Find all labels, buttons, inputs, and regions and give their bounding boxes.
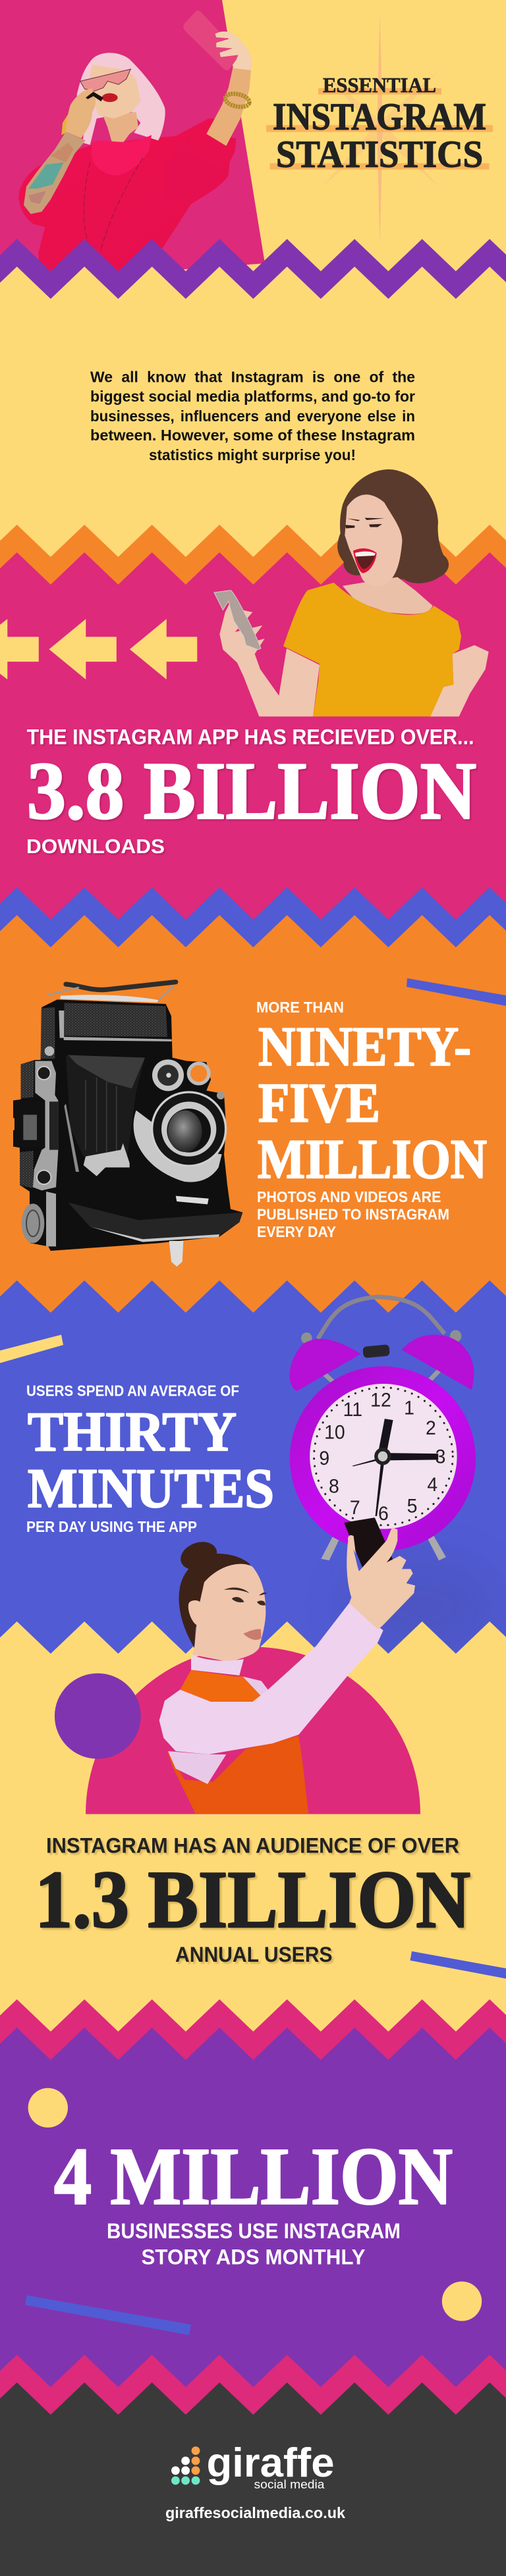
winding knob [46,1192,56,1246]
orange vest [180,1670,262,1702]
gold bracelet [224,92,250,109]
photo: purple alarm clock [290,1297,476,1560]
panel: 4 million businesses [0,1999,506,2390]
description [257,1188,449,1240]
blue accent bar [407,978,506,1006]
photo: woman with pink hair taking a selfie [18,11,252,276]
yellow accent bar [0,1335,63,1363]
numerals [319,1390,445,1525]
panel: introduction [0,239,506,560]
panel: footer [0,2355,506,2576]
bell posts [323,1369,441,1384]
title [266,73,493,176]
hair [337,469,449,583]
strap [66,982,176,990]
logo wordmark: giraffe [207,2440,335,2486]
numerals: 2 [426,1418,436,1439]
big number: FIVE [258,1072,380,1134]
big number: THIRTY [28,1401,237,1463]
hand with lipstick [66,89,96,138]
panel: header [0,0,506,303]
intro text: statistics might surprise you! [149,446,356,463]
yellow background [0,267,506,560]
pink semicircle [86,1647,420,1814]
numerals: 7 [350,1497,360,1519]
blue background [0,1280,506,1659]
sub-heading: DOWNLOADS [26,835,165,858]
hammer [362,1344,390,1358]
lead-in text: USERS SPEND AN AVERAGE OF [26,1382,239,1399]
raised fist [430,645,489,716]
cowl neck [91,135,152,176]
feet [321,1534,446,1560]
big number: 4 MILLION [54,2132,453,2222]
arm and hand [219,601,320,716]
lens assembly [134,1111,222,1182]
description: STORY ADS MONTHLY [141,2245,365,2269]
bellows [66,1055,145,1157]
pink background [0,552,506,922]
outer ring [290,1367,476,1551]
knobs [301,1332,312,1344]
phone [183,11,239,70]
icon: logo dots [171,2446,200,2484]
minute dots [314,1388,453,1525]
hair [77,53,165,145]
blue accent bar [410,1951,506,1979]
lead-in text: MORE THAN [256,999,344,1016]
purple zigzag band [0,239,506,309]
top dial [152,1059,184,1091]
head and neck [188,1564,266,1662]
neck and chest [343,577,433,614]
phone [345,1519,393,1571]
foot [169,1241,183,1267]
raised arm and hand [206,32,252,146]
title: ESSENTIAL [323,73,436,97]
clock hands [352,1419,438,1516]
logo tagline: social media [254,2478,325,2491]
hand [347,1540,415,1629]
lips [102,93,118,102]
panel: ninety-five million [0,887,506,1317]
big number: NINETY- [258,1016,471,1078]
sunglasses [80,69,130,91]
intro text [90,369,415,463]
yellow background [0,1621,506,2034]
description: BUSINESSES USE INSTAGRAM [107,2219,401,2243]
drop base [68,1203,242,1240]
big number: MILLION [258,1128,487,1190]
numerals: 5 [407,1496,417,1517]
bells [290,1339,361,1391]
numerals: 10 [324,1422,345,1444]
pink zigzag band [0,1999,506,2064]
description: PUBLISHED TO INSTAGRAM [257,1206,449,1223]
numerals: 1 [404,1398,414,1419]
leather top [64,1003,167,1037]
left chrome frame [33,1061,58,1190]
blue zigzag band [0,887,506,955]
intro text: businesses, influencers and everyone else in [90,407,415,425]
heading: INSTAGRAM HAS AN AUDIENCE OF OVER [46,1833,459,1857]
hair [179,1554,250,1648]
purple background [0,2028,506,2390]
yellow dress [283,583,461,716]
tattooed forearm [24,132,86,214]
orange background [0,915,506,1317]
lilac collar [191,1654,244,1675]
photo: vintage folding camera [13,982,242,1267]
pink angled shape [0,0,265,283]
mouth [353,548,377,573]
heading: THE INSTAGRAM APP HAS RECIEVED OVER... [27,725,474,749]
facial features [224,1587,267,1606]
panel: thirty minutes [0,1280,506,1659]
dark background [0,2382,506,2576]
numerals: 11 [343,1400,362,1421]
star decoration [323,13,438,245]
phone [214,591,261,650]
website url: giraffesocialmedia.co.uk [165,2504,345,2521]
numerals: 4 [427,1474,437,1496]
numerals: 9 [319,1448,329,1469]
numerals: 6 [378,1504,389,1525]
big number: 3.8 BILLION [27,746,476,836]
description: EVERY DAY [257,1223,336,1240]
description: PER DAY USING THE APP [26,1518,197,1535]
hair bun [177,1537,221,1575]
photo: excited woman with phone [214,469,489,716]
lilac sleeve [159,1603,383,1754]
intro text: biggest social media platforms, and go-to for [90,388,415,405]
purple circle [55,1673,141,1759]
big number: MINUTES [28,1458,274,1519]
pink zigzag band [0,2355,506,2423]
description [107,2219,401,2269]
description: PHOTOS AND VIDEOS ARE [257,1188,441,1205]
numerals: 12 [370,1390,391,1411]
chrome lever [84,1143,130,1176]
numerals: 3 [436,1446,445,1468]
lilac under-sleeve [168,1677,268,1784]
big number [258,1016,487,1190]
handle [318,1297,445,1339]
film holder [13,1101,45,1147]
orange zigzag band [0,525,506,592]
yellow dot top-left [28,2088,68,2128]
face [345,494,402,586]
clock shadow [343,1560,501,1652]
necklace [84,158,143,249]
title: STATISTICS [276,133,483,176]
big number: 1.3 BILLION [35,1854,470,1945]
sub-heading: ANNUAL USERS [175,1943,332,1966]
blue accent bar [25,2295,191,2335]
clock face [310,1384,457,1529]
left arrows [0,619,197,679]
panel: 3.8 billion downloads [0,469,506,922]
neck [103,112,138,152]
photo: woman reaching up with phone [159,1519,415,1814]
sweater [18,118,236,276]
intro text: between. However, some of these Instagram [90,427,415,444]
big number [28,1401,274,1519]
viewfinder ring [188,1063,209,1084]
sleeve fold [163,136,229,202]
numerals: 8 [329,1476,339,1497]
intro text: We all know that Instagram is one of the [90,369,415,386]
title: INSTAGRAM [273,95,486,138]
yellow dot right [442,2282,482,2321]
face [88,65,140,118]
panel: 1.3 billion users [0,1519,506,2034]
camera body [13,999,242,1251]
